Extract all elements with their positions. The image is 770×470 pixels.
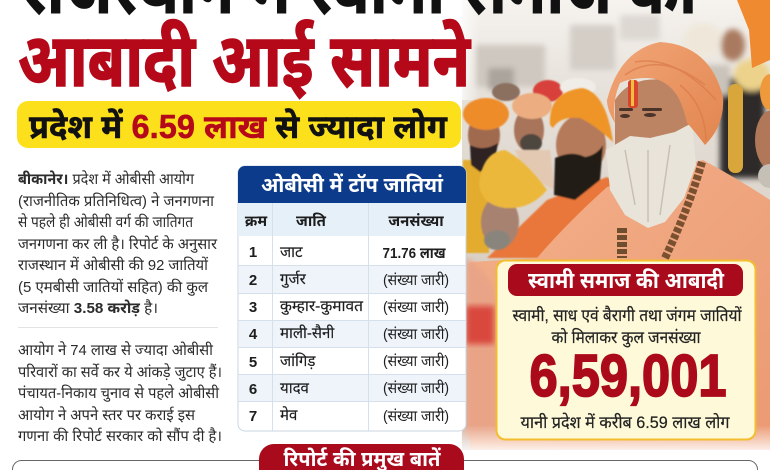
face — [615, 79, 693, 150]
callout description: स्वामी, साध एवं बैरागी तथा जंगम जातियों — [512, 306, 742, 325]
second paragraph: पंचायत-निकाय चुनाव से पहले ओबीसी — [18, 384, 220, 403]
rudraksha beads — [665, 162, 702, 258]
man with yellow turban — [479, 150, 547, 250]
callout: swami samaj population — [496, 260, 756, 440]
intro paragraph — [18, 170, 218, 317]
callout heading: स्वामी समाज की आबादी — [528, 268, 724, 293]
intro paragraph: से पहले ही ओबीसी वर्ग की जातिगत — [18, 213, 193, 231]
right man — [755, 110, 770, 170]
row 3 — [249, 298, 449, 316]
callout: swami samaj population: को मिलाकर कुल जनसंख्या — [552, 329, 701, 348]
intro paragraph: बीकानेर। प्रदेश में ओबीसी आयोग — [18, 170, 195, 188]
bottom panel outline — [12, 460, 758, 470]
callout footnote: यानी प्रदेश में करीब 6.59 लाख लोग — [520, 413, 730, 432]
man with black beard — [487, 88, 625, 258]
brows and eyes — [619, 108, 662, 118]
crowd behind — [683, 23, 770, 178]
alternate row shading — [239, 265, 465, 401]
row 5: (संख्या जारी) — [383, 353, 449, 370]
column headers: जनसंख्या — [388, 213, 444, 230]
title line 2: आबादी आई सामने — [18, 19, 471, 102]
tilak — [628, 80, 638, 108]
row 2: (संख्या जारी) — [383, 272, 449, 289]
intro paragraph: राजस्थान में ओबीसी की 92 जातियों — [18, 256, 209, 274]
main sadhu — [465, 42, 770, 450]
intro paragraph: जनसंख्या 3.58 करोड़ है। — [18, 300, 158, 317]
row 4 — [249, 325, 449, 343]
row 7 — [249, 406, 449, 425]
subtitle text: प्रदेश में 6.59 लाख से ज्यादा लोग — [29, 107, 448, 145]
row 5 — [249, 353, 449, 371]
second paragraph: आयोग ने 74 लाख से ज्यादा ओबीसी — [18, 341, 214, 359]
row 3: (संख्या जारी) — [383, 299, 449, 316]
staff — [728, 84, 743, 173]
row 7: (संख्या जारी) — [383, 408, 449, 425]
intro paragraph: (5 एमबीसी जातियों सहित) की कुल — [18, 278, 209, 297]
row 7: 7 — [249, 408, 257, 425]
row 4: (संख्या जारी) — [383, 326, 449, 343]
turban — [607, 42, 723, 145]
second paragraph: परिवारों का सर्वे कर ये आंकड़े जुटाए हैं। — [18, 363, 222, 382]
body — [470, 160, 770, 450]
row 2: गुर्जर — [280, 270, 307, 289]
bottom white fade — [462, 425, 770, 455]
intro paragraph: (राजनीतिक प्रतिनिधित्व) ने जनगणना — [18, 192, 215, 210]
intro paragraph: जनगणना कर ली है। रिपोर्ट के अनुसार — [18, 235, 218, 254]
red and white turbans — [492, 78, 596, 190]
beard — [606, 123, 696, 228]
second paragraph — [18, 341, 222, 445]
second paragraph: गणना की रिपोर्ट सरकार को सौंप दी है। — [18, 427, 222, 445]
row 1: जाट — [280, 244, 303, 261]
report highlights pill — [259, 444, 464, 470]
left white fade — [455, 0, 480, 100]
row 6: यादव — [280, 380, 310, 397]
table rows — [249, 244, 449, 425]
row 1 — [249, 244, 446, 262]
row 5: जांगिड़ — [280, 353, 316, 370]
column headers: क्रम — [245, 213, 267, 230]
row 3: 3 — [249, 299, 257, 316]
row 4: माली-सैनी — [280, 325, 335, 342]
row 3: कुम्हार-कुमावत — [280, 298, 363, 316]
row 5: 5 — [249, 354, 257, 371]
column headers: जाति — [296, 213, 327, 230]
subtitle banner — [17, 101, 461, 148]
row 1: 71.76 लाख — [382, 245, 446, 262]
row 1: 1 — [249, 244, 257, 261]
man at left, orange turban — [463, 98, 509, 253]
temple buildings — [475, 15, 660, 90]
row 2 — [249, 270, 449, 289]
table heading — [238, 166, 466, 203]
row 4: 4 — [249, 326, 258, 343]
column headers — [238, 203, 466, 236]
row 7: मेव — [280, 406, 298, 424]
row 6: 6 — [249, 381, 257, 398]
table heading: ओबीसी में टॉप जातियां — [261, 173, 444, 197]
big number: 6,59,001 — [530, 343, 726, 409]
table: top OBC castes — [238, 166, 466, 431]
flag — [737, 0, 770, 68]
row 6: (संख्या जारी) — [383, 380, 449, 397]
left arm — [465, 258, 498, 440]
second paragraph: आयोग ने अपने स्तर पर कराई इस — [18, 406, 196, 424]
row 6 — [249, 380, 449, 398]
background photo: sadhus in crowd — [455, 0, 770, 470]
row 2: 2 — [249, 272, 257, 289]
